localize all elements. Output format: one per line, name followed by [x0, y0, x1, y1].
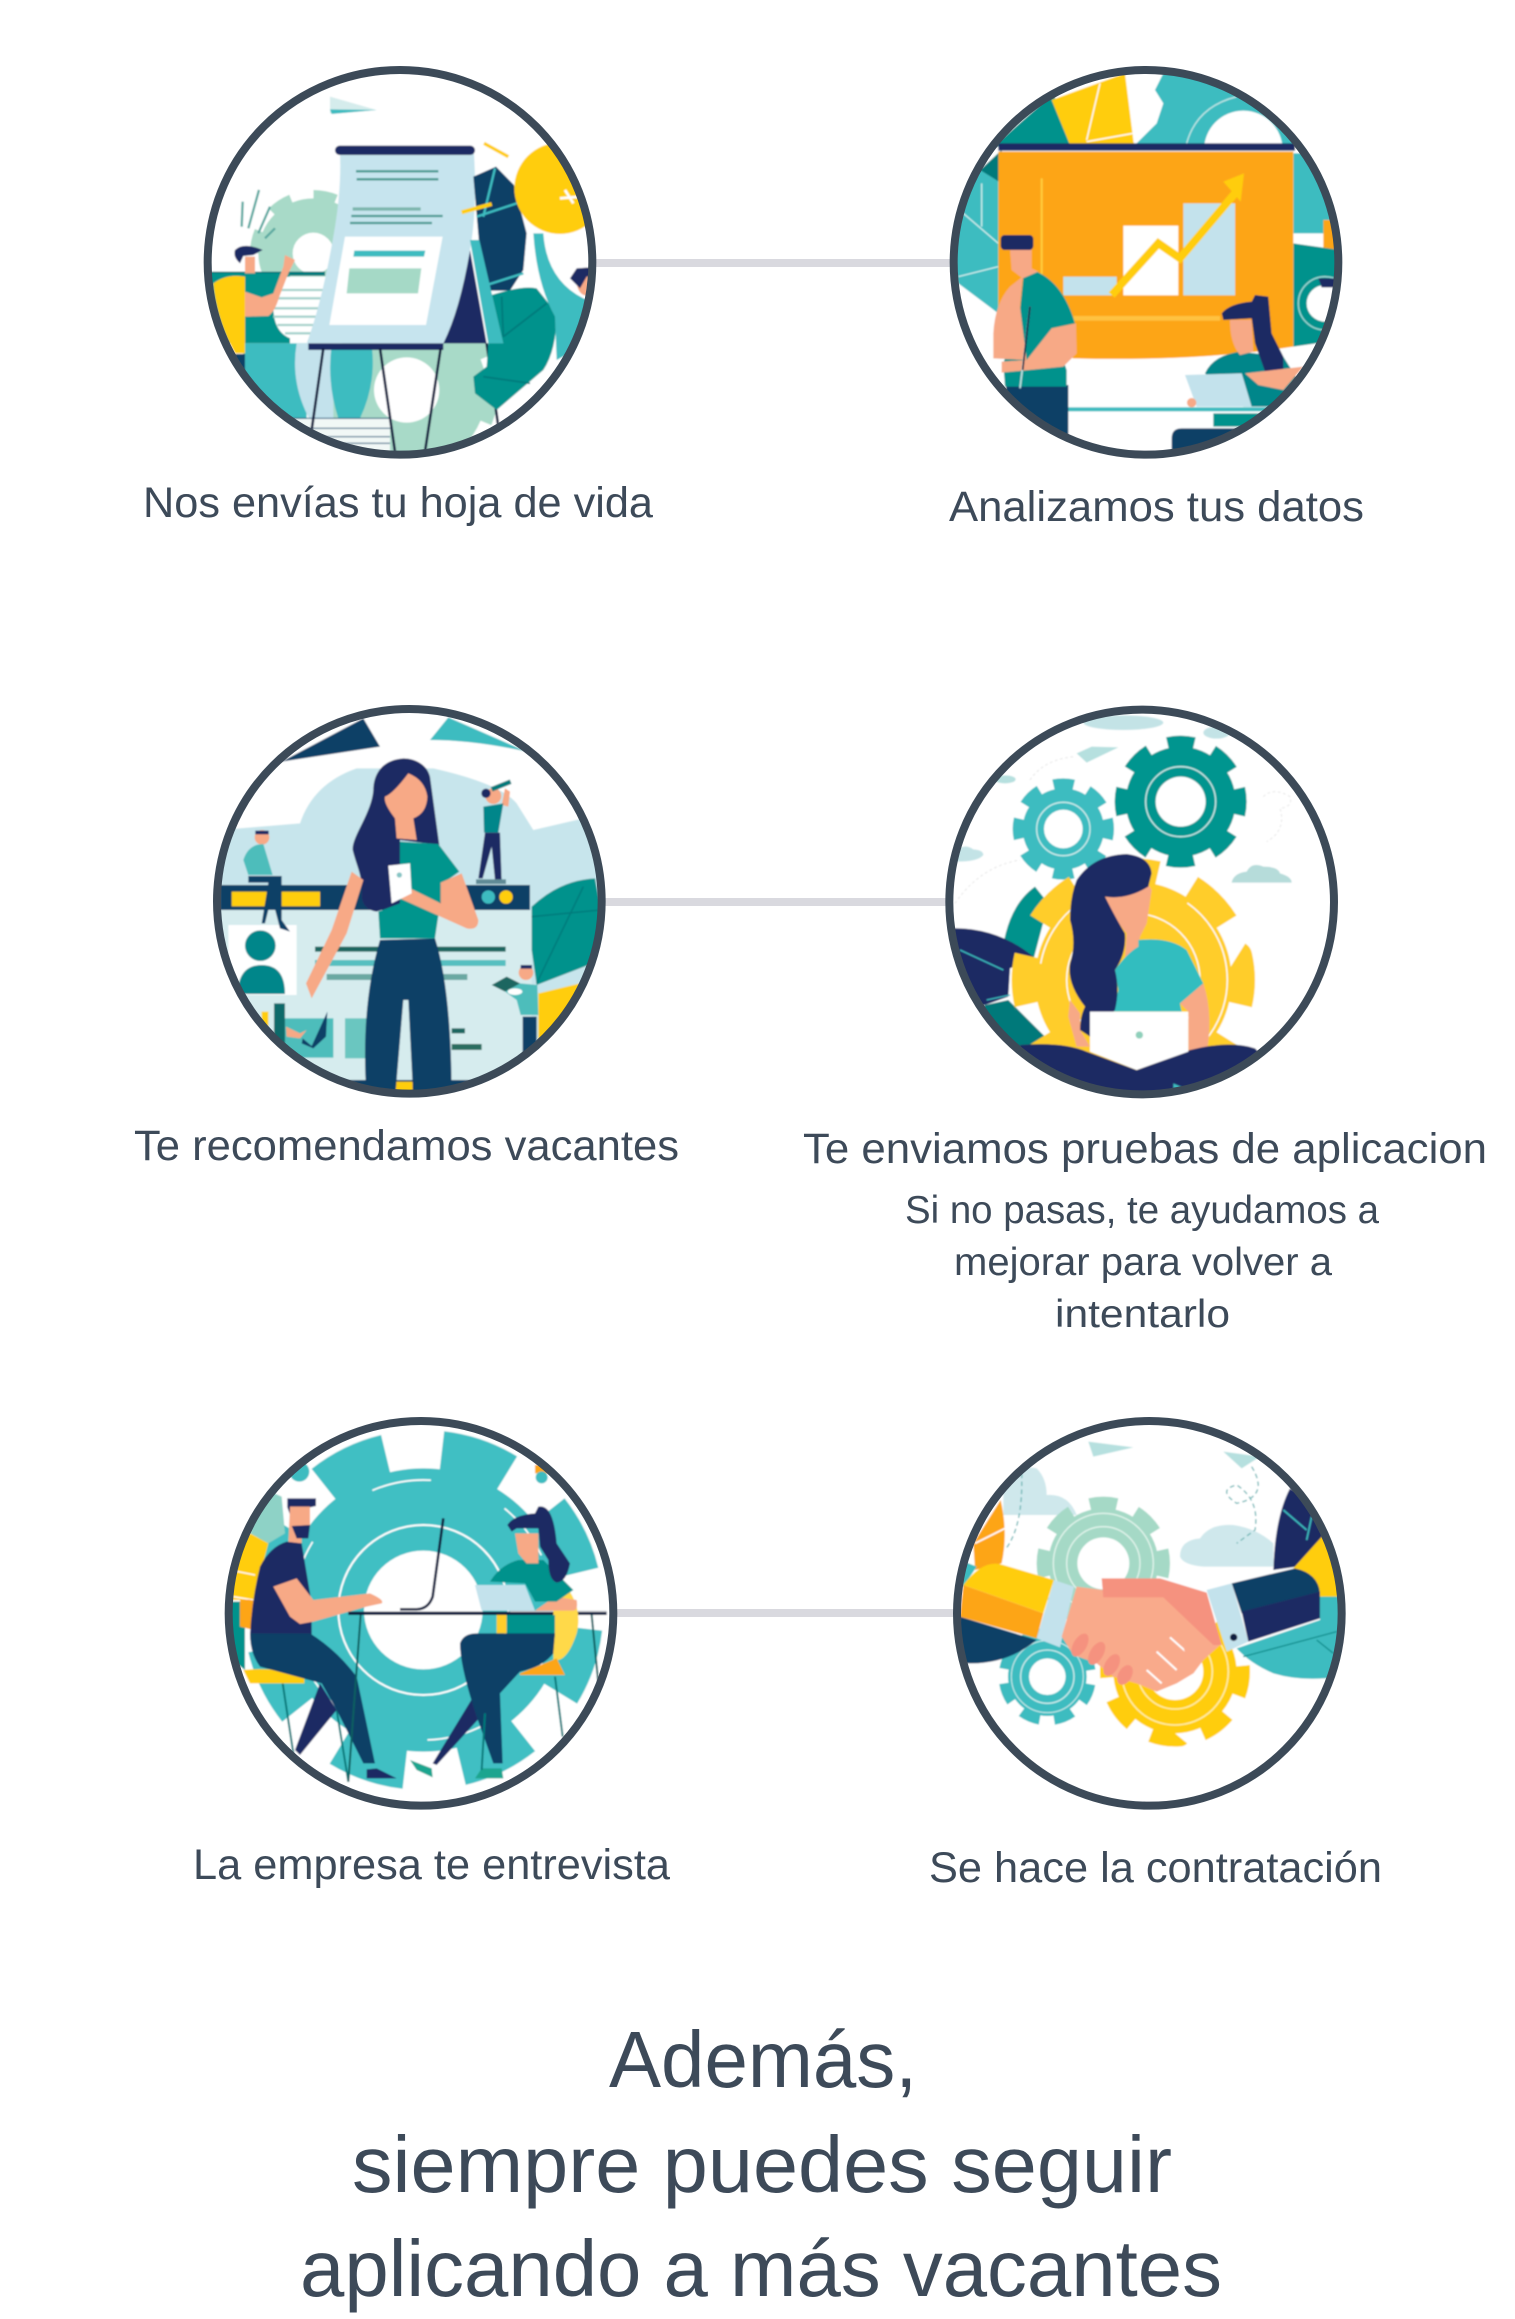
panel: step 4 tests illustration — [945, 706, 1338, 1098]
illustration: woman with phone over webpage — [221, 717, 598, 1090]
woman seated — [410, 1506, 578, 1778]
left decorations — [230, 1488, 285, 1670]
woman — [1020, 853, 1258, 1090]
panel: step 3 recommended vacancies illustration — [213, 705, 606, 1098]
closing line 2: siempre puedes seguir — [352, 2120, 1172, 2209]
table and laptop — [348, 1518, 607, 1782]
orange board — [998, 152, 1293, 359]
illustration: handshake with gears — [961, 1441, 1338, 1748]
caption: step 5: La empresa te entrevista — [193, 1841, 670, 1889]
connector line row 2 — [602, 898, 952, 906]
right arm and sleeve — [1207, 1488, 1350, 1679]
caption: step 3: Te recomendamos vacantes — [134, 1122, 679, 1170]
closing line 3: aplicando a más vacantes — [300, 2224, 1222, 2313]
circle outline — [949, 710, 1334, 1094]
panel: step 5 interview illustration — [224, 1417, 618, 1810]
connector line row 3 — [614, 1609, 956, 1617]
clouds and paper planes — [1003, 1442, 1273, 1567]
icon: light bulb — [460, 141, 585, 235]
dark teal gear — [1112, 733, 1249, 870]
yellow gear — [1010, 858, 1256, 1070]
leaves — [950, 887, 1048, 1050]
circle outline — [954, 70, 1338, 455]
clouds and plane — [955, 715, 1292, 903]
note: step 4 line 1: Si no pasas, te ayudamos a — [905, 1189, 1379, 1232]
left arm and sleeve — [957, 1500, 1074, 1663]
closing message — [300, 2015, 1222, 2313]
main woman — [306, 758, 478, 1100]
caption: step 6: Se hace la contratación — [929, 1844, 1382, 1892]
mint gear — [1033, 1493, 1173, 1633]
small figure with book — [492, 965, 538, 1060]
bar chart with rising arrow — [1041, 173, 1244, 321]
small figure with laptop — [243, 830, 290, 932]
illustration: woman with gears and laptop — [955, 714, 1292, 1090]
panel: step 1 presenting resume illustration — [204, 66, 596, 459]
connector line row 1 — [592, 259, 954, 267]
flipchart — [307, 146, 498, 452]
big gear — [246, 1433, 601, 1787]
icon: excitement lines — [242, 190, 275, 238]
yellow gear — [1103, 1599, 1247, 1744]
illustration: flipchart scene — [212, 96, 588, 451]
closing line 1: Además, — [609, 2015, 917, 2104]
presenter figure — [213, 246, 295, 371]
seated woman with laptop — [1172, 295, 1303, 453]
small figure with binoculars — [476, 782, 511, 884]
illustration: chart presentation — [958, 74, 1334, 449]
caption: step 1: Nos envías tu hoja de vida — [143, 479, 653, 527]
leaves — [473, 167, 557, 410]
teal gear — [997, 1626, 1098, 1727]
right figure — [532, 232, 588, 360]
note: step 4 line 3: intentarlo — [1055, 1293, 1230, 1336]
circle outline — [957, 1421, 1342, 1806]
man seated — [240, 1498, 397, 1782]
clasped hands — [1062, 1578, 1222, 1692]
note: step 4 line 2: mejorar para volver a — [954, 1241, 1332, 1284]
webpage window — [220, 885, 532, 1097]
panel: step 6 handshake illustration — [953, 1417, 1346, 1810]
illustration: two people at table with big gear — [232, 1430, 608, 1790]
circle outline — [229, 1421, 613, 1806]
caption: step 4: Te enviamos pruebas de aplicacion — [803, 1125, 1487, 1173]
light teal gear — [1012, 778, 1114, 880]
circle outline — [208, 70, 592, 455]
caption: step 2: Analizamos tus datos — [949, 483, 1364, 531]
leaf and yellow shape — [530, 878, 598, 1040]
standing man — [993, 235, 1077, 455]
circle outline — [217, 709, 602, 1094]
panel: step 2 data chart illustration — [950, 66, 1342, 459]
